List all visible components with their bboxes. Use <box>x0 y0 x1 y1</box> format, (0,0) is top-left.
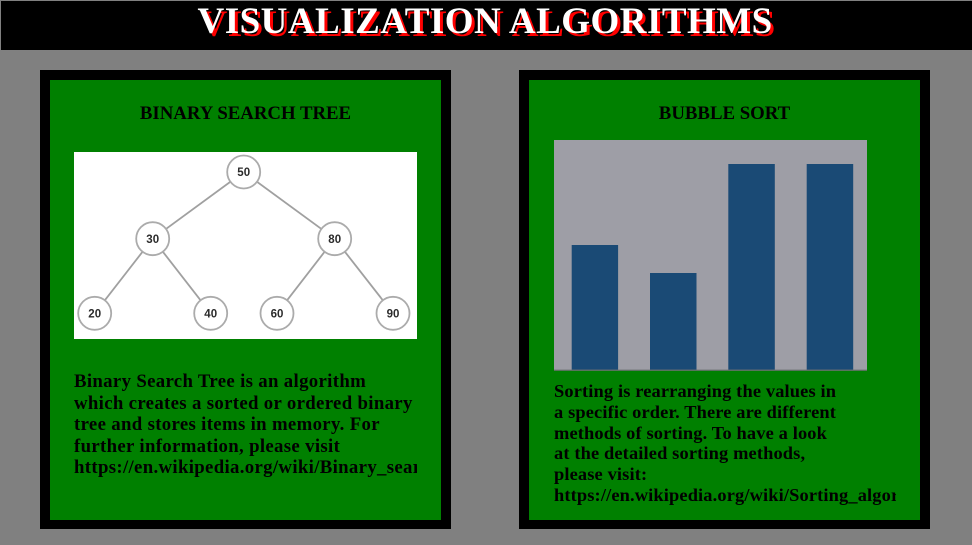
description: bubble sort: methods of sorting. To have a look <box>554 423 827 443</box>
description: bubble sort: Sorting is rearranging the values in <box>554 381 836 401</box>
tree diagram: 90 <box>387 308 399 320</box>
description: binary search tree: tree and stores items in memory. For <box>74 414 380 435</box>
description: bubble sort: at the detailed sorting methods, <box>554 443 805 463</box>
tree diagram: 40 <box>204 308 217 320</box>
description: bubble sort: a specific order. There are different <box>554 402 836 422</box>
panel background <box>50 80 441 520</box>
description: bubble sort <box>554 381 896 505</box>
description: binary search tree: which creates a sorted or ordered binary <box>74 393 413 414</box>
description: bubble sort: please visit: <box>554 464 647 484</box>
description: binary search tree <box>74 371 417 478</box>
description: binary search tree: further information, please visit <box>74 436 340 457</box>
description: binary search tree: Binary Search Tree is an algorithm <box>74 371 366 392</box>
panel background <box>529 80 920 520</box>
heading: binary search tree: BINARY SEARCH TREE <box>140 103 351 124</box>
tree diagram: 60 <box>271 308 283 320</box>
tree diagram: 30 <box>146 234 159 246</box>
panel: binary search tree <box>40 70 451 529</box>
bar chart <box>554 140 867 371</box>
panel: bubble sort <box>519 70 930 529</box>
tree diagram: 80 <box>328 234 341 246</box>
tree diagram: 20 <box>88 308 101 320</box>
tree diagram <box>74 152 417 339</box>
tree diagram: 50 <box>237 167 250 179</box>
header bar <box>1 1 972 50</box>
title: VISUALIZATION ALGORITHMS <box>198 1 773 42</box>
heading: bubble sort: BUBBLE SORT <box>659 103 790 124</box>
